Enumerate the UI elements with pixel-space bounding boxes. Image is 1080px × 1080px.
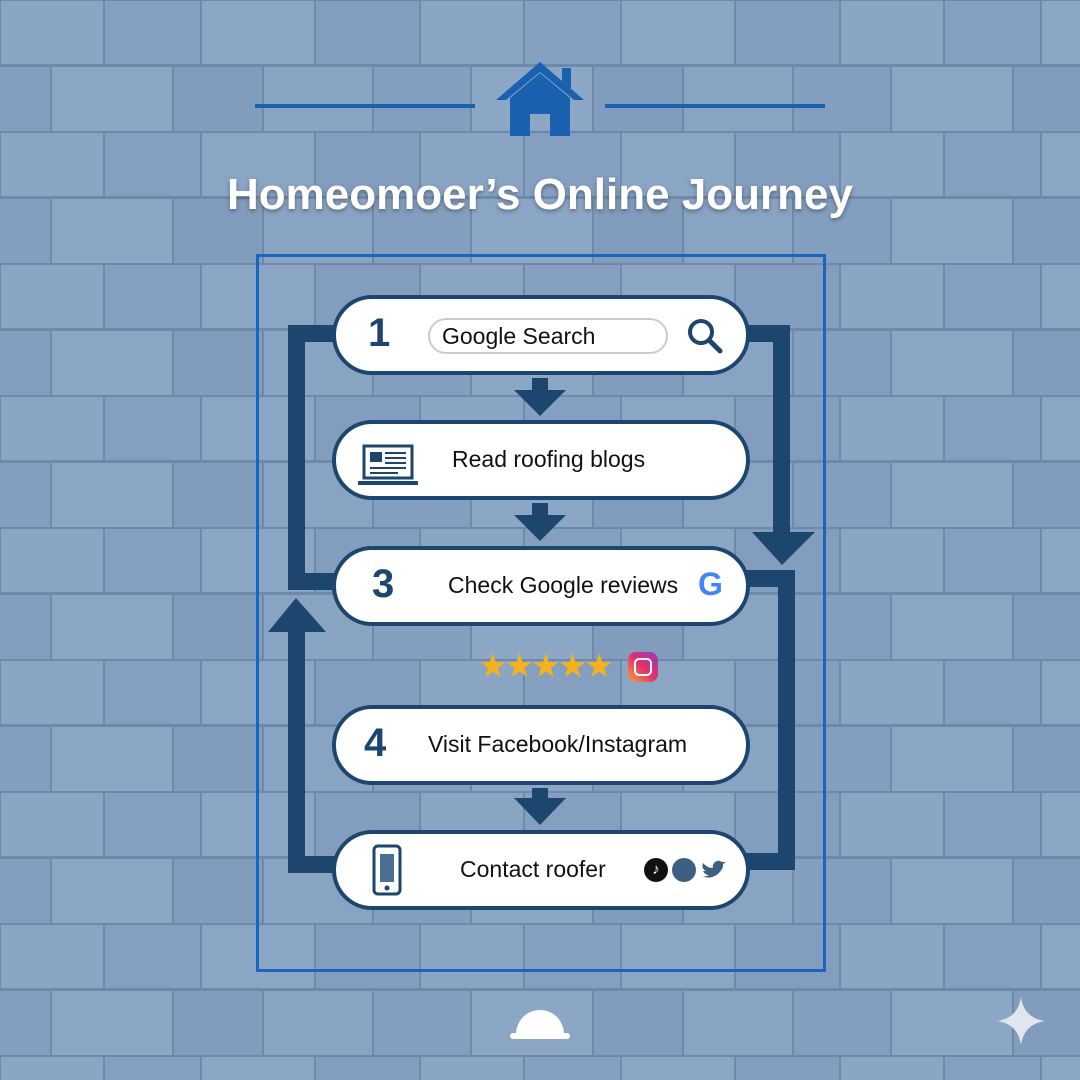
icon: house bbox=[496, 62, 584, 136]
step 1: 1 bbox=[368, 311, 390, 355]
icon: phone bbox=[372, 844, 402, 896]
icon: hard hat bbox=[510, 1010, 570, 1039]
icon: google G: G bbox=[698, 566, 723, 602]
step 5: Contact roofer bbox=[460, 856, 606, 882]
icon: sparkle bbox=[998, 998, 1044, 1045]
search bar bbox=[428, 318, 668, 354]
step 4 bbox=[332, 705, 750, 785]
step 1 bbox=[332, 295, 750, 375]
frame bbox=[256, 254, 826, 972]
step 2: Read roofing blogs bbox=[452, 446, 645, 472]
step 5 bbox=[332, 830, 750, 910]
icons: social bbox=[644, 858, 726, 882]
icon: magnifier bbox=[688, 319, 722, 354]
step 2 bbox=[332, 420, 750, 500]
icons: social: ♪ bbox=[652, 861, 660, 878]
icon: instagram bbox=[628, 652, 658, 682]
rating stars and instagram: ★★★★★ bbox=[478, 647, 611, 684]
search bar: Google Search bbox=[442, 323, 595, 349]
step 4: Visit Facebook/Instagram bbox=[428, 731, 687, 757]
header decorative lines bbox=[255, 104, 475, 108]
step 3: Check Google reviews bbox=[448, 572, 678, 598]
step 3 bbox=[332, 546, 750, 626]
step 4: 4 bbox=[364, 721, 386, 765]
title: Homeomoer’s Online Journey bbox=[227, 170, 853, 219]
step 3: 3 bbox=[372, 562, 394, 606]
icon: laptop bbox=[358, 444, 418, 485]
